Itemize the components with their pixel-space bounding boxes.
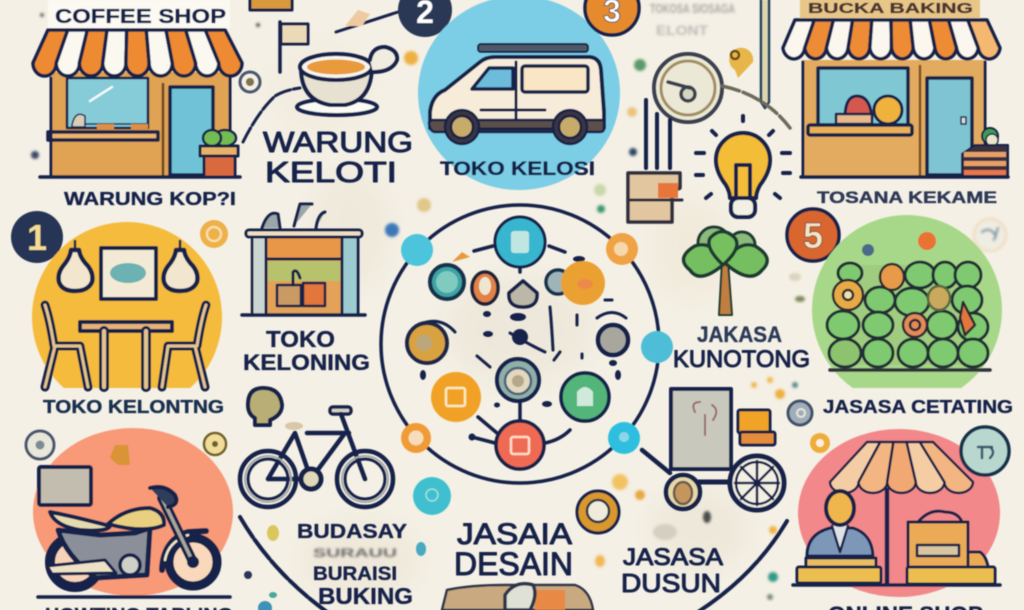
- arc: lower right: [698, 521, 787, 610]
- node: blue behind orange: [546, 270, 570, 294]
- icon: small target left of cup: [240, 72, 260, 92]
- label: jasasa dusun: DUSUN: [621, 568, 721, 598]
- heading: jasaia desain: [454, 518, 573, 582]
- heading: shop sign bukka baking: [800, 0, 980, 18]
- icon: gauge dial: [646, 54, 790, 168]
- icon: small navy dot: [244, 571, 252, 579]
- icon: faded emblem upper right: [974, 219, 1006, 251]
- heading: warung keloti: WARUNG: [263, 127, 413, 159]
- panel: toko kelosi van: [418, 0, 620, 190]
- label: budasay buraisi buking: [297, 521, 413, 609]
- icon: teal dot: [269, 592, 277, 598]
- icon: orange ring coin: [810, 433, 830, 453]
- node: teal ring: [430, 265, 464, 299]
- seat and tank: [50, 512, 110, 530]
- crate with plant: [962, 128, 1008, 175]
- icon: bottom object: [442, 584, 593, 610]
- node: large orange upper right: [561, 261, 605, 305]
- icon: flag sign: [280, 22, 308, 72]
- heading: warung keloti: [263, 127, 413, 189]
- faded text: top centre: [650, 1, 735, 38]
- panel: dining room: [32, 222, 222, 412]
- node: teal right: [641, 331, 673, 363]
- connector lines and dark marks: [418, 246, 626, 443]
- icon: blue dot bottom: [258, 601, 272, 610]
- node: teal top: [495, 217, 545, 267]
- icon: orange coin: [200, 220, 228, 248]
- node: teal lower right: [608, 422, 640, 454]
- icon: teal badge with glyph: [961, 427, 1009, 475]
- illustration: delivery cart: [642, 389, 784, 510]
- lattice backing: [843, 265, 975, 365]
- heading: jasaia desain: DESAIN: [454, 546, 573, 582]
- label: toko kelosi: TOKO KELOSI: [440, 159, 595, 180]
- node: grey right: [598, 325, 628, 355]
- net coins: [833, 232, 975, 337]
- node: amber left: [407, 323, 447, 363]
- node: orange upper right: [606, 233, 638, 265]
- icon: vertical pole: [761, 0, 769, 108]
- label: jasasa dusun: JASASA: [623, 544, 723, 571]
- badge: number 1: 1: [27, 217, 47, 258]
- icon: coffee cup: [243, 47, 397, 142]
- icon: bell shape: [248, 388, 282, 425]
- label: budasay buraisi buking: BUDASAY: [297, 521, 408, 543]
- heading: coffee shop: [48, 0, 230, 28]
- label: warung kopi: WARUNG KOP?I: [64, 188, 236, 209]
- icon: framed picture at top: [250, 0, 292, 10]
- badge: number 1: [11, 211, 63, 263]
- node: green lower right: [561, 373, 609, 421]
- umbrella: [830, 442, 973, 493]
- panel: online shop vendor: [793, 429, 1000, 597]
- front fork and handle: [162, 498, 193, 562]
- node: red bottom: [496, 421, 544, 469]
- rear wheel: [50, 537, 100, 587]
- label: budasay buraisi buking: BURAISI: [313, 564, 397, 585]
- heading: shop sign bukka baking: BUCKA BAKING: [808, 0, 973, 17]
- heading: jasaia desain: JASAIA: [457, 518, 572, 551]
- badge: number 3: [585, 0, 639, 35]
- icon: light bulb: [696, 116, 790, 217]
- plant pot: [200, 130, 238, 177]
- label: toko kelonting left: TOKO KELONTNG: [43, 397, 224, 417]
- label: toko kelonting centre-left: TOKO: [266, 326, 335, 352]
- icon: location pin: [729, 48, 753, 78]
- label: budasay buraisi buking: SURAUU: [313, 546, 397, 560]
- illustration: coffee shop storefront: [33, 30, 242, 177]
- node: orange oval: [472, 272, 498, 304]
- label: jasasa cetating: JASASA CETATING: [823, 396, 1013, 417]
- label: jakasa kunotong: KUNOTONG: [673, 346, 810, 373]
- heading: warung keloti: KELOTI: [265, 157, 397, 189]
- badge: number 2: [398, 0, 452, 37]
- label: toko kelonting centre-left: [243, 326, 370, 375]
- icon: small teal drop: [416, 542, 426, 556]
- icon: parcel box: [628, 173, 682, 222]
- front fender: [162, 531, 206, 570]
- front wheel: [169, 538, 217, 586]
- node: grey: [509, 281, 537, 307]
- icon: ringed coin centre bottom: [577, 491, 619, 533]
- icon: yellow dot: [267, 525, 279, 541]
- label: jasasa dusun: [621, 544, 723, 598]
- icon: yellow ring coin: [204, 433, 226, 455]
- icon: ring top-left of motorcycle: [26, 431, 54, 459]
- node: small teal upper left: [401, 234, 433, 266]
- panel: central network diagram: [381, 205, 673, 483]
- net cells: [827, 262, 988, 367]
- arc: lower left: [240, 517, 327, 610]
- label: tosana kekame: TOSANA KEKAME: [817, 188, 997, 207]
- label: budasay buraisi buking: BUKING: [318, 583, 413, 609]
- node: orange ring lower left: [401, 423, 431, 453]
- vendor person: [807, 491, 873, 556]
- icon: yellow splashes: [595, 474, 645, 567]
- confetti dots: [31, 13, 805, 600]
- faded text: top centre: TOKOSA SIOSAGA: [650, 1, 735, 16]
- label: jakasa kunotong: JAKASA: [697, 322, 782, 347]
- illustration: small grocery shop: [242, 204, 365, 315]
- icon: teal ring circle: [413, 477, 451, 515]
- panel: green net: [812, 215, 1002, 405]
- awning: [783, 20, 1000, 59]
- label: jakasa kunotong: [673, 322, 810, 373]
- label: toko kelonting centre-left: KELONING: [243, 350, 370, 375]
- illustration: bicycle: [240, 407, 393, 507]
- icon: tree: [684, 227, 767, 315]
- faded text: top centre: ELONT: [656, 22, 708, 38]
- heading: coffee shop: COFFEE SHOP: [55, 6, 226, 28]
- icon: pencil scribble: [336, 10, 398, 32]
- illustration: bakery storefront: [783, 20, 1008, 177]
- awning: [33, 30, 242, 76]
- node: ringed centre: [497, 359, 539, 401]
- badge: number 5: [787, 209, 839, 261]
- panel: motorcycle: [33, 428, 233, 597]
- engine and frame: [58, 528, 150, 578]
- badge: number 5: 5: [803, 215, 823, 256]
- icon: ringed coin right of cart: [788, 401, 812, 425]
- node: orange lower left: [431, 372, 481, 422]
